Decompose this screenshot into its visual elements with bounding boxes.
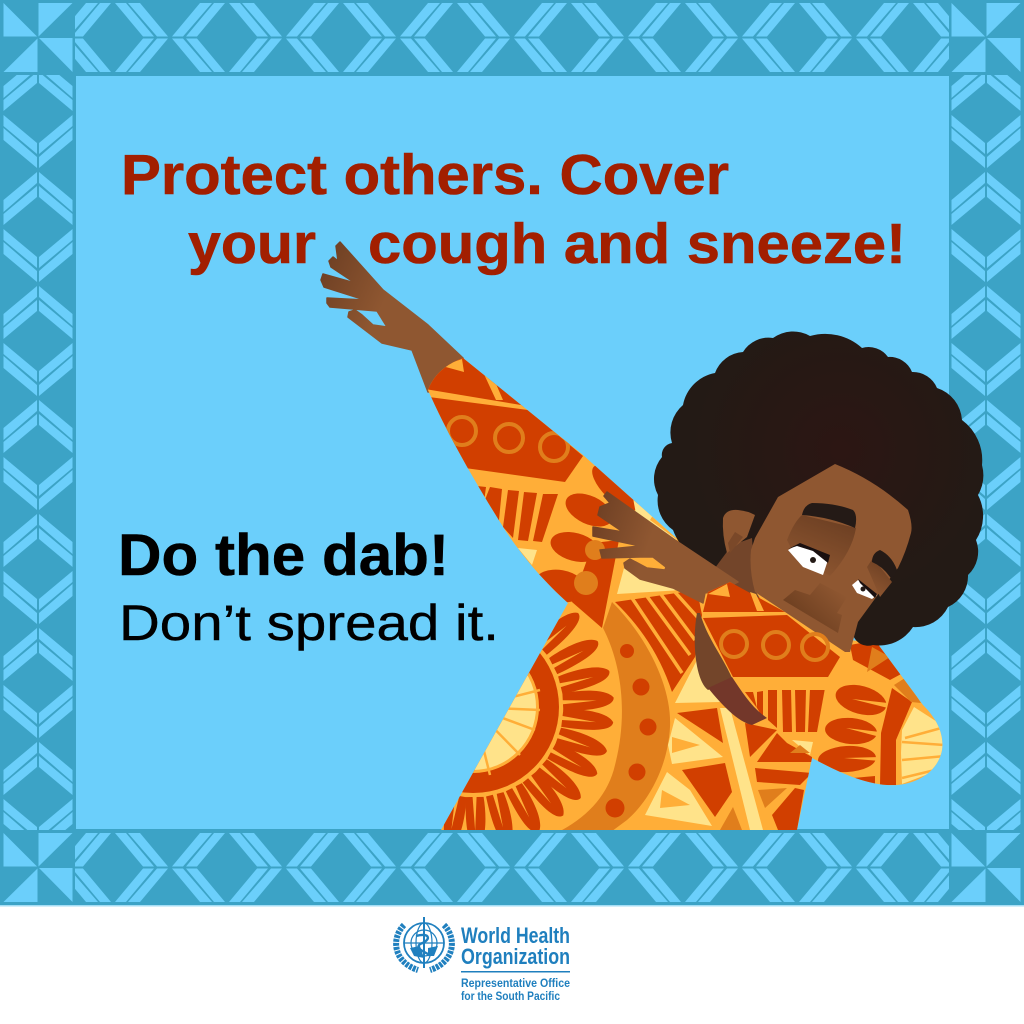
raised hand and wrist	[321, 242, 470, 392]
WHO logo	[396, 917, 570, 1003]
torso: lower geometric panels	[645, 708, 813, 830]
ear	[723, 510, 755, 553]
slogan text: Don’t spread it.	[119, 595, 499, 651]
eye right	[852, 579, 877, 599]
torso: mandala petals	[444, 612, 614, 830]
chest sleeve overlay	[703, 582, 847, 690]
eyebrow right	[872, 550, 897, 580]
hand covering face	[593, 492, 738, 603]
patterned shirt	[428, 358, 942, 830]
panel: sky blue background	[76, 76, 949, 829]
torso: red triangle with dots	[572, 540, 619, 628]
WHO wordmark	[461, 923, 570, 1003]
border: bottom band	[1, 833, 1023, 902]
slogan text	[118, 523, 499, 651]
nose and mouth shadow	[783, 583, 847, 633]
headline: Protect others. Cover	[121, 143, 729, 207]
torso: mandala centre	[462, 653, 559, 793]
headline: cough and sneeze!	[368, 212, 906, 276]
afro hair	[654, 331, 983, 646]
white footer strip	[0, 905, 1024, 1024]
border: right band	[952, 1, 1020, 1023]
chest: vertical stripes	[745, 688, 825, 732]
figure: dabbing man	[321, 242, 983, 848]
WHO wordmark: Organization	[461, 944, 570, 969]
torso: curved stripes	[615, 590, 702, 692]
WHO wordmark: World Health	[461, 923, 570, 948]
right sleeve: elbow pattern	[850, 640, 945, 785]
eyebrow left	[802, 503, 856, 528]
shirt collar shadow	[695, 613, 767, 725]
neck	[712, 538, 762, 602]
WHO wordmark: Representative Office	[461, 976, 570, 990]
headline: your	[188, 212, 316, 276]
sleeve: cuff pattern	[428, 358, 528, 411]
right sleeve: petals	[818, 684, 886, 784]
eye shadow left	[787, 515, 856, 576]
WHO emblem	[396, 917, 452, 970]
torso: mandala ring	[562, 602, 670, 830]
eye shadow right	[867, 558, 892, 597]
eye left	[788, 543, 830, 575]
sleeve: red band with rings	[429, 397, 583, 482]
face	[750, 464, 912, 652]
border: left band	[4, 1, 72, 1023]
WHO wordmark: for the South Pacific	[461, 989, 560, 1003]
sleeve: petals	[539, 466, 638, 602]
slogan text: Do the dab!	[118, 523, 449, 588]
sleeve: vertical stripes	[477, 486, 558, 542]
headline	[121, 143, 906, 276]
border: top band	[1, 3, 1023, 72]
